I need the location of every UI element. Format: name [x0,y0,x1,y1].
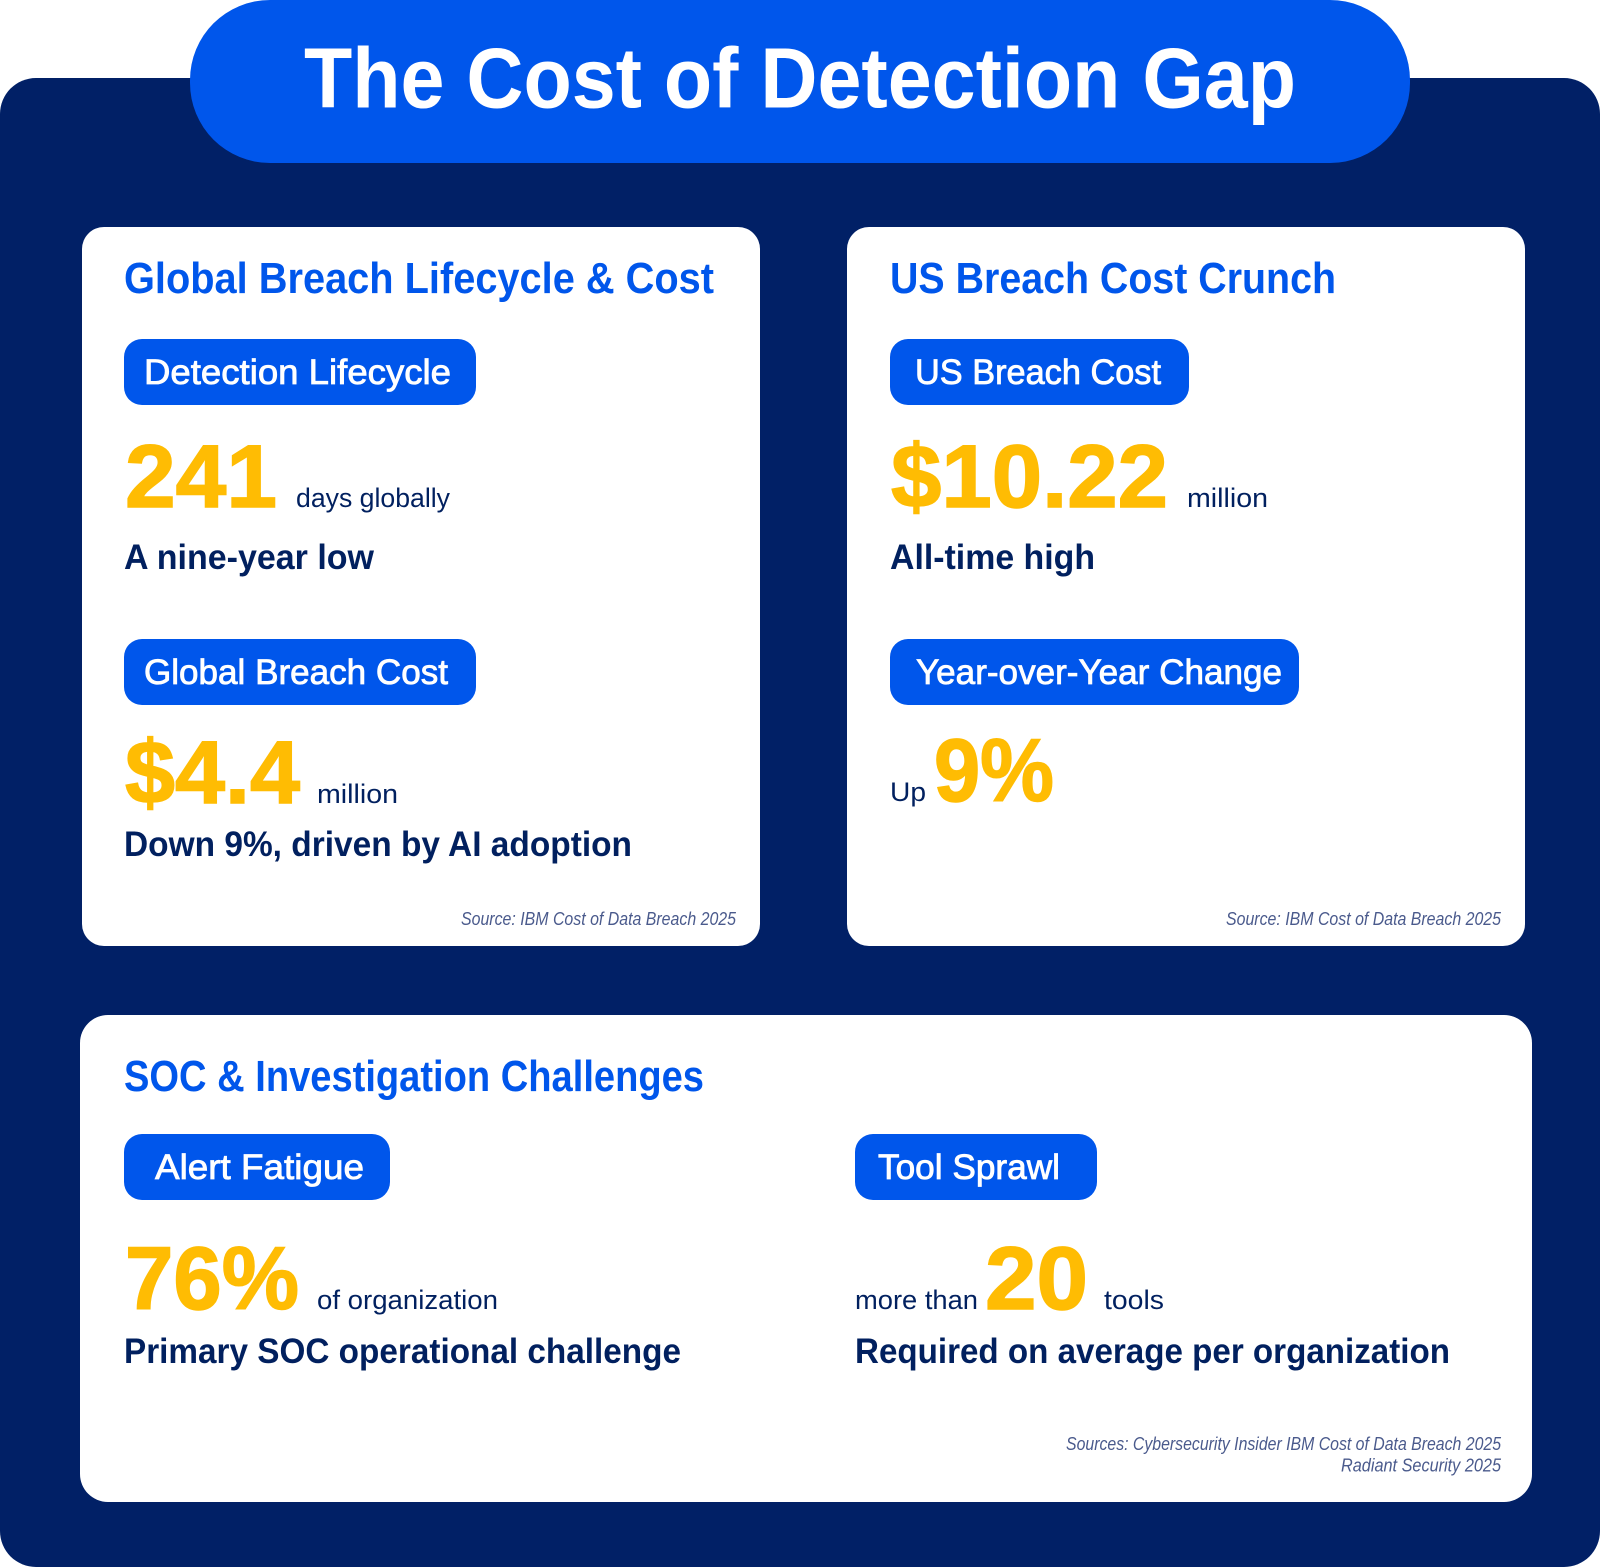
description: down 9 percent: Down 9%, driven by AI adoption [124,825,632,864]
stat: 241 days globally [125,426,450,526]
heading: global breach lifecycle and cost: Global Breach Lifecycle & Cost [124,254,714,303]
panel: us breach cost crunch [847,227,1525,946]
source note: Source: IBM Cost of Data Breach 2025 [1226,909,1502,929]
stat: up 9 percent: 9% [934,720,1054,820]
badge: global breach cost [124,639,476,705]
badge: tool sprawl [855,1134,1097,1200]
heading: us breach cost crunch: US Breach Cost Crunch [890,254,1336,303]
badge: alert fatigue: Alert Fatigue [155,1148,364,1187]
description: required on average per organization: Required on average per organization [855,1332,1450,1371]
stat: $4.4 million: million [317,779,398,809]
badge: alert fatigue [124,1134,390,1200]
badge: detection lifecycle [124,339,476,405]
panel: global breach lifecycle and cost [82,227,760,946]
stat: more than 20 tools: more than [855,1285,978,1315]
badge: detection lifecycle: Detection Lifecycle [144,353,451,392]
heading: soc and investigation challenges: SOC & Investigation Challenges [124,1052,704,1101]
badge: year-over-year change [890,639,1299,705]
source note: Radiant Security 2025 [1341,1456,1502,1476]
stat: 76 percent of organization: 76% [125,1228,299,1328]
description: all-time high: All-time high [890,538,1095,577]
stat: $10.22 million: $10.22 [891,426,1168,526]
description: primary soc operational challenge: Primary SOC operational challenge [124,1332,681,1371]
source note: Source: IBM Cost of Data Breach 2025 [461,909,737,929]
stat: $4.4 million: $4.4 [125,722,300,822]
title: The Cost of Detection Gap [304,32,1296,126]
stat: 241 days globally: days globally [296,483,450,513]
stat: up 9 percent [890,720,1054,820]
panel: soc and investigation challenges [80,1015,1532,1502]
source note: Sources: Cybersecurity Insider IBM Cost of Data Breach 2025 [1066,1434,1502,1454]
stat: more than 20 tools [855,1228,1164,1328]
stat: more than 20 tools: 20 [985,1228,1088,1328]
badge: year-over-year change: Year-over-Year Change [916,653,1282,692]
stat: $4.4 million [125,722,398,822]
badge: global breach cost: Global Breach Cost [144,653,448,692]
source note [1066,1434,1502,1476]
badge: us breach cost [890,339,1189,405]
badge: us breach cost: US Breach Cost [915,353,1161,392]
badge: tool sprawl: Tool Sprawl [878,1148,1060,1187]
stat: up 9 percent: Up [890,777,926,807]
stat: more than 20 tools: tools [1104,1285,1164,1315]
stat: 76 percent of organization [125,1228,498,1328]
description: a nine-year low: A nine-year low [124,538,375,577]
stat: 241 days globally: 241 [125,426,277,526]
stat: $10.22 million: million [1187,483,1268,513]
stat: 76 percent of organization: of organization [317,1285,498,1315]
title banner [190,0,1410,163]
